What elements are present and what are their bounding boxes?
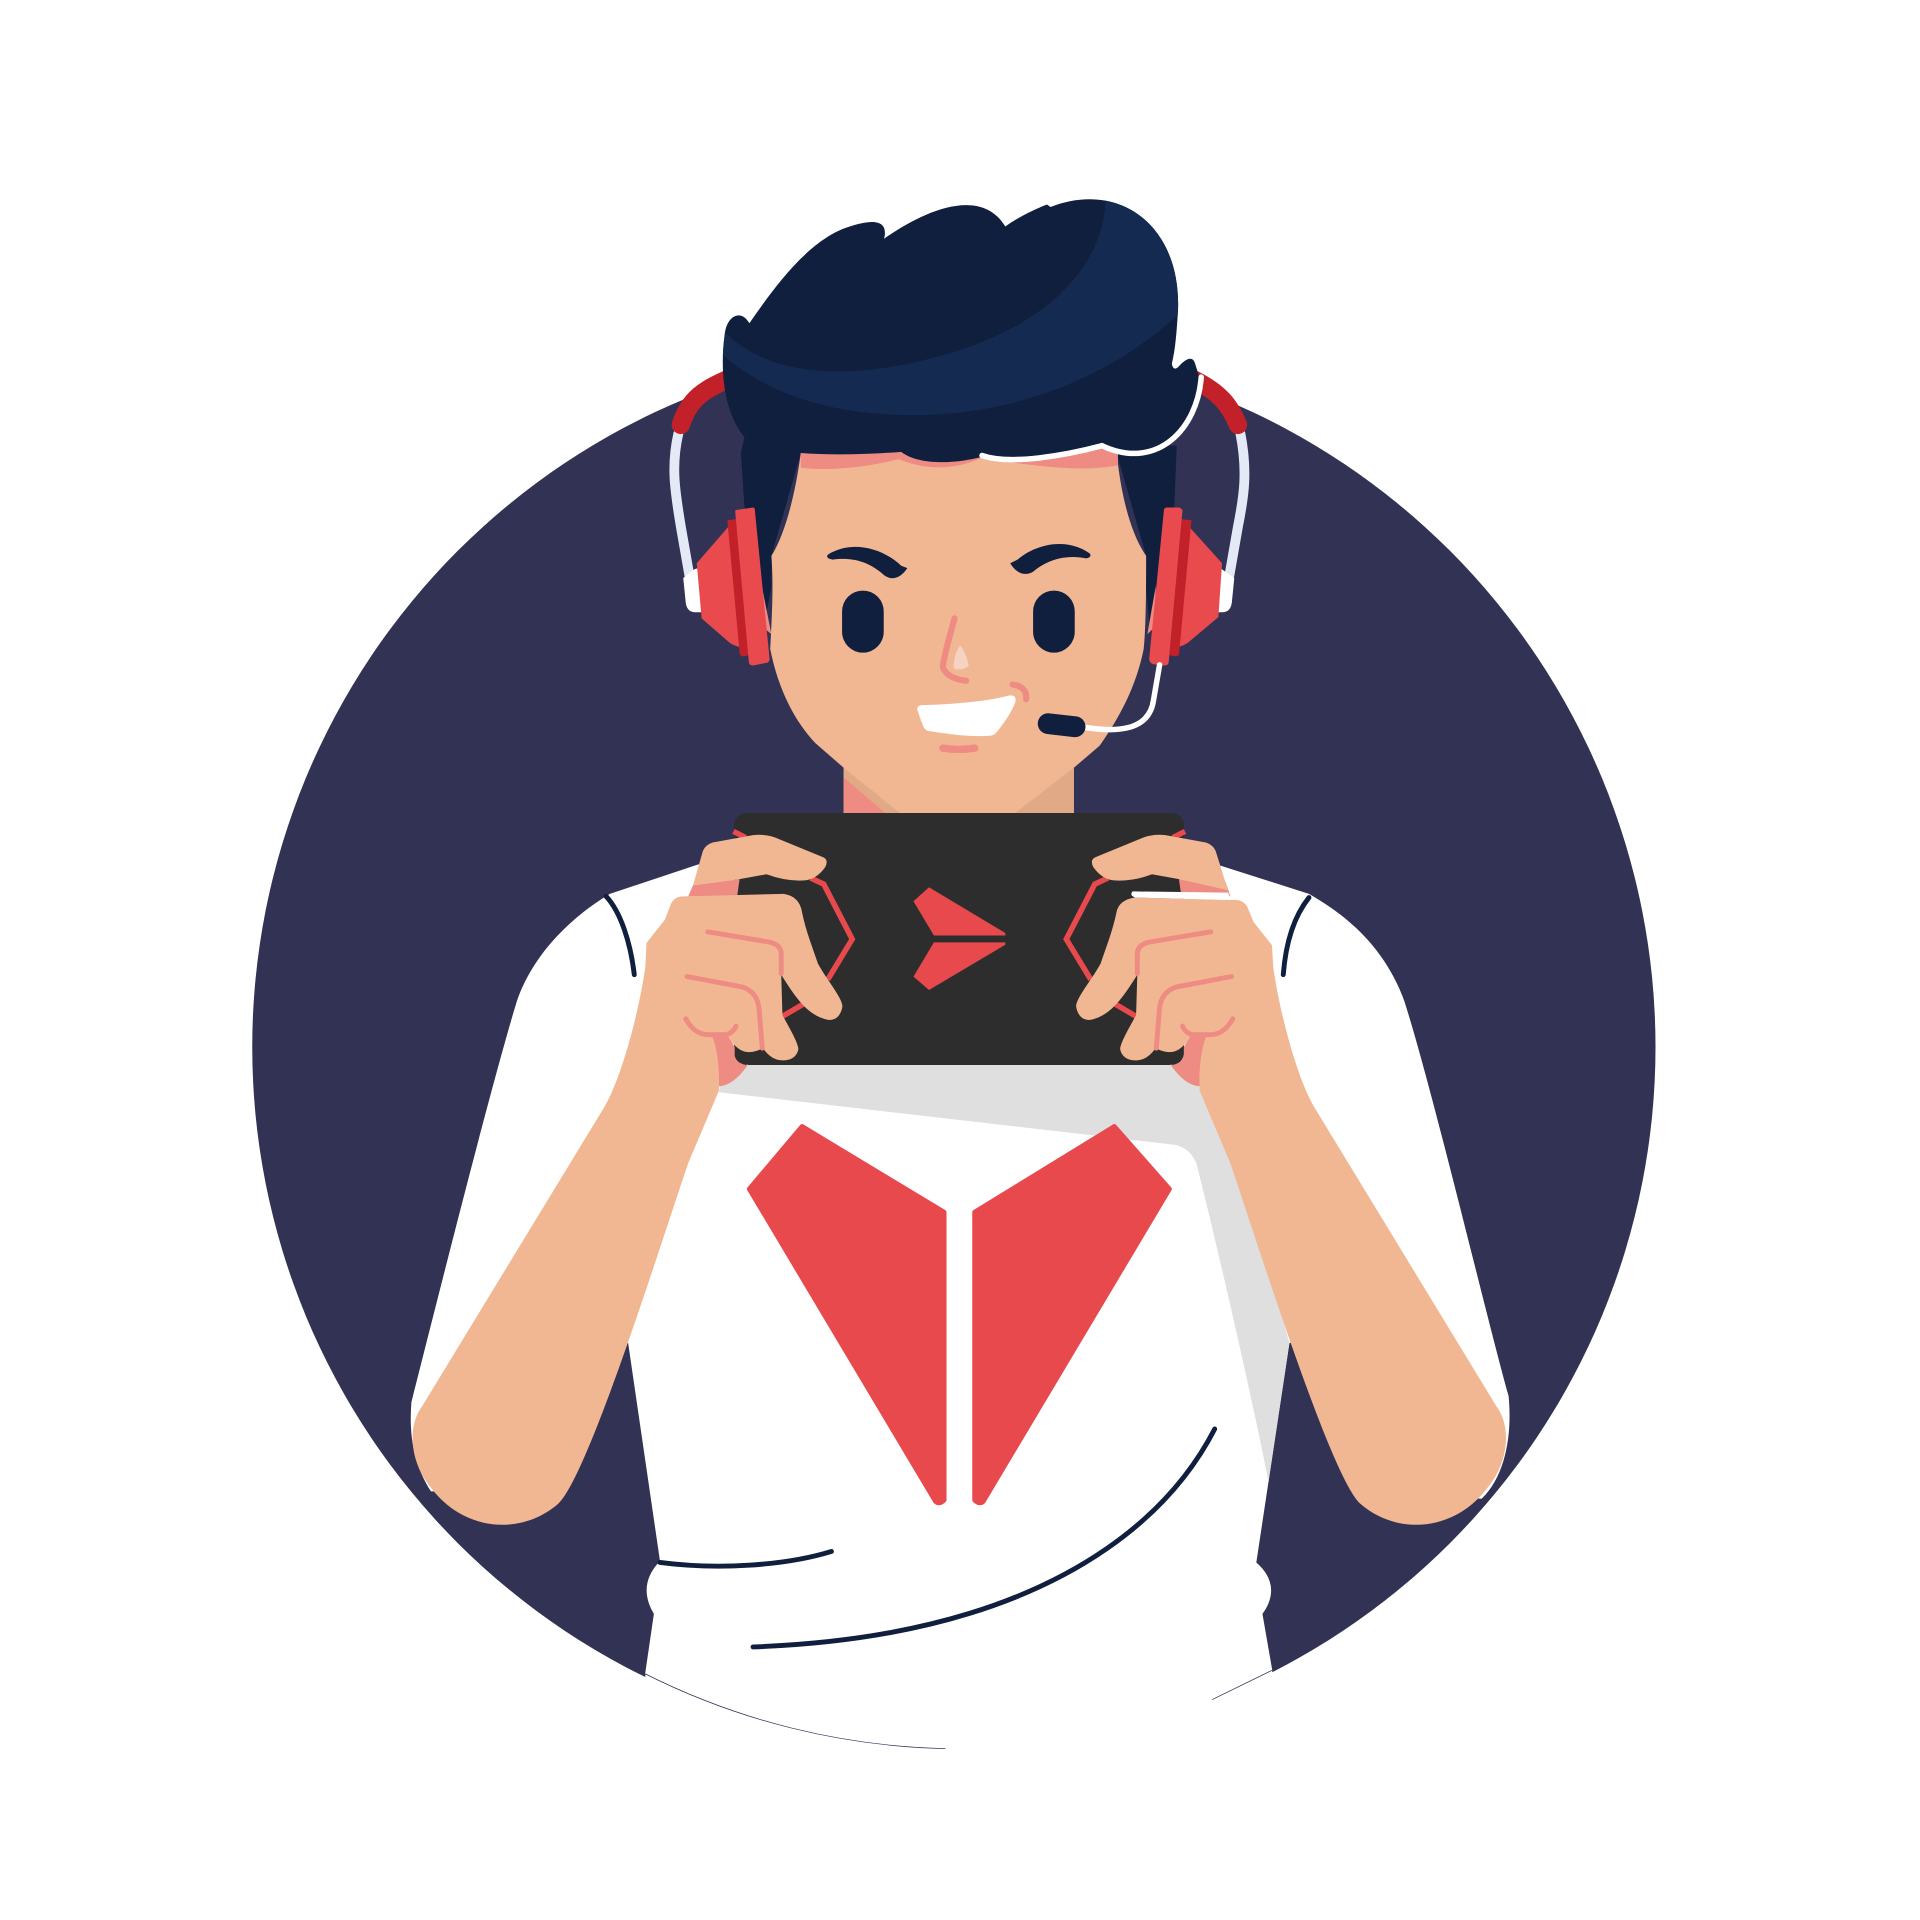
shirt emblem right <box>975 1127 1169 1503</box>
left red band <box>681 377 732 425</box>
headset back: band and wires <box>674 377 1244 576</box>
right ear cup <box>1147 508 1234 665</box>
left finger creases <box>686 932 781 1048</box>
right finger creases <box>1137 932 1233 1048</box>
right cup <box>1171 524 1222 648</box>
hair highlight <box>722 200 1178 415</box>
left back finger shadow <box>688 879 740 896</box>
right palm shadow <box>1170 1035 1207 1086</box>
left wire <box>674 433 689 576</box>
right arm and fingers <box>1076 898 1506 1525</box>
forehead shadow <box>801 448 1118 469</box>
neck shadows <box>844 768 1074 813</box>
right eyebrow <box>1010 544 1090 574</box>
right wire <box>1229 433 1244 576</box>
left palm shadow <box>711 1035 748 1086</box>
right dark strip <box>1169 519 1191 656</box>
cheek mark <box>1013 684 1026 699</box>
play logo top <box>913 887 1005 936</box>
shirt fold lines <box>606 896 1309 1647</box>
background circle <box>252 345 1656 1749</box>
shirt hem sliver right <box>1212 1670 1272 1700</box>
lower lip <box>943 748 975 749</box>
left back finger <box>693 835 827 885</box>
nose line <box>943 618 966 681</box>
left white clip <box>683 568 703 612</box>
right back finger <box>1092 835 1228 890</box>
phone body <box>734 813 1184 1065</box>
right white clip <box>1217 568 1234 612</box>
shirt and sleeves <box>411 864 1510 1776</box>
illustration: gamer with headset holding a phone <box>252 199 1656 1749</box>
left dark strip <box>727 519 749 656</box>
microphone <box>1048 665 1160 730</box>
left hand and arm <box>413 831 852 1525</box>
left ear sliver <box>762 585 771 634</box>
left arm and fingers <box>413 894 842 1525</box>
mic arm <box>1085 665 1160 730</box>
hair base <box>723 199 1200 462</box>
long fold <box>753 1429 1215 1647</box>
left cup <box>697 524 747 648</box>
face <box>770 453 1146 816</box>
left ear cup <box>683 508 771 665</box>
hair <box>716 190 1200 462</box>
side hair <box>741 437 1177 627</box>
shirt emblem left <box>749 1127 944 1503</box>
play logo bottom <box>913 942 1005 990</box>
left front strip <box>736 508 769 665</box>
right eye <box>1033 591 1075 653</box>
left eyebrow <box>827 547 907 578</box>
shirt hem sliver left <box>645 1674 945 1749</box>
white strip on right hand <box>1131 891 1231 900</box>
right sleeve fold <box>1283 898 1309 975</box>
left eye <box>842 591 884 653</box>
left hexagon stroke <box>733 831 852 1016</box>
right red band <box>1194 380 1238 425</box>
right hexagon stroke <box>1066 831 1185 1016</box>
headset cable over hair <box>982 377 1201 460</box>
shirt shadow under phone <box>719 1064 1289 1482</box>
right ear sliver <box>1147 585 1156 634</box>
mouth <box>917 695 1016 736</box>
left sleeve fold <box>606 896 634 975</box>
right hand and arm <box>1066 831 1506 1525</box>
right front strip <box>1150 508 1182 665</box>
mic head <box>1048 724 1075 727</box>
nose highlight <box>954 645 969 669</box>
phone <box>734 813 1184 1065</box>
hem fold <box>660 1551 831 1566</box>
right back finger shadow <box>1179 879 1230 896</box>
